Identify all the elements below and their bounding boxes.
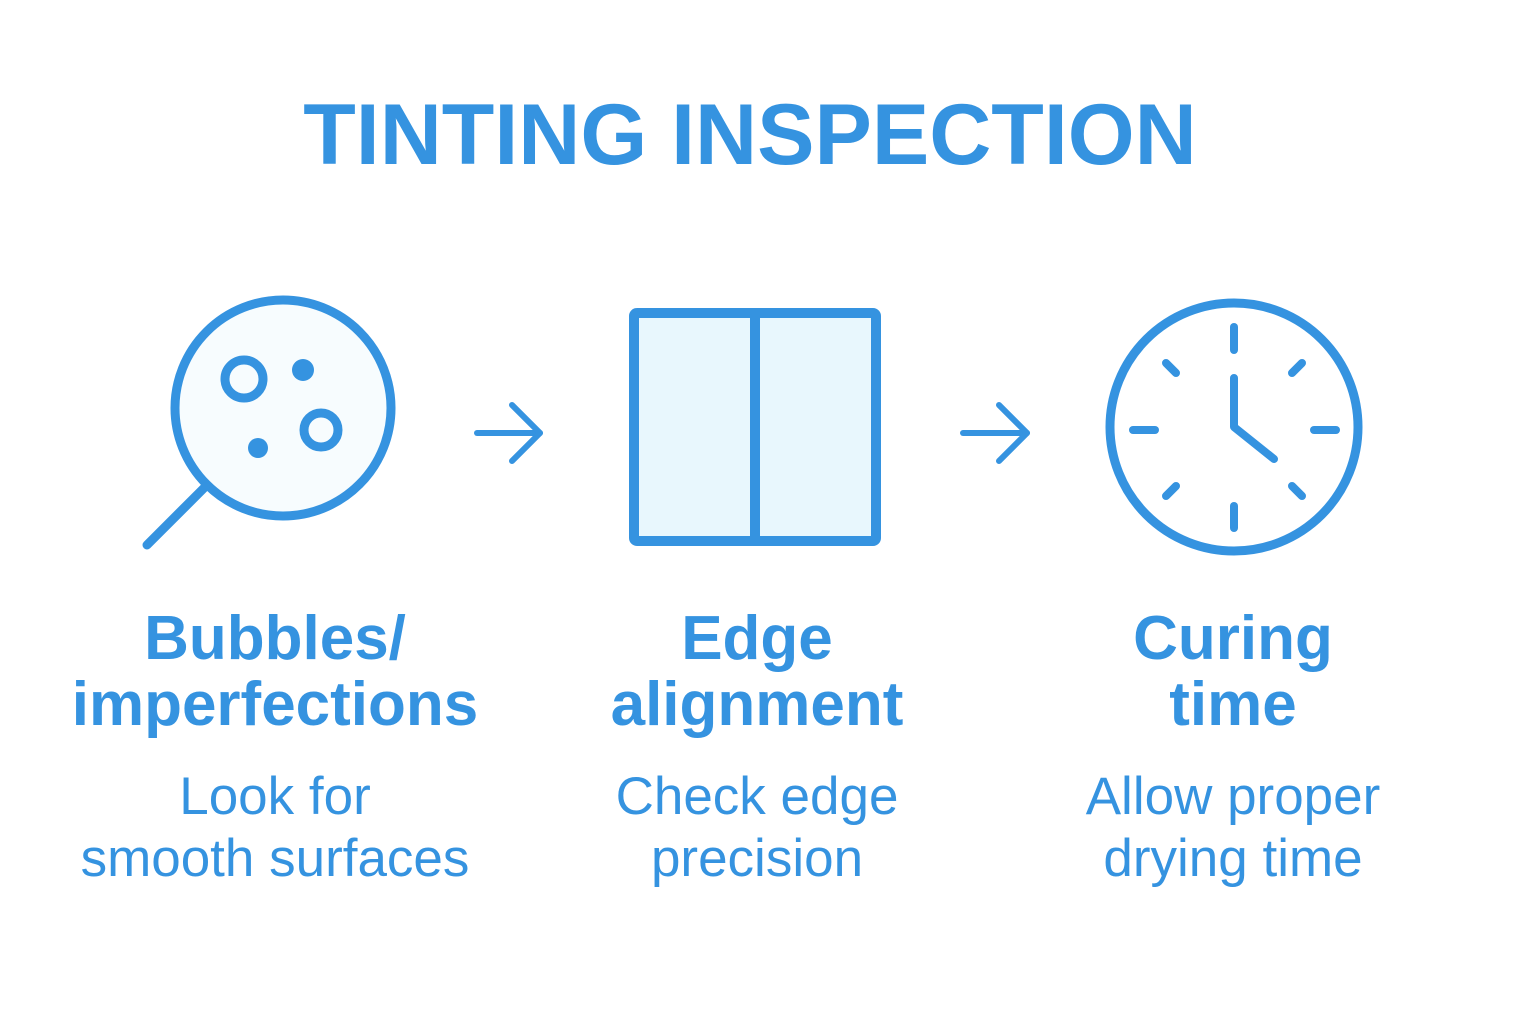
icon: clock bbox=[1110, 303, 1358, 551]
heading: edge bbox=[611, 604, 903, 739]
text: bubbles bbox=[81, 767, 469, 888]
heading: curing: time bbox=[1169, 670, 1297, 739]
heading: curing bbox=[1133, 604, 1333, 739]
text: edge: precision bbox=[651, 829, 863, 888]
text: edge bbox=[616, 767, 898, 888]
heading: edge: alignment bbox=[611, 670, 903, 739]
heading: curing: Curing bbox=[1133, 604, 1333, 673]
arrow 2 bbox=[963, 405, 1027, 461]
heading: bubbles bbox=[72, 604, 478, 739]
column: edge bbox=[611, 604, 903, 888]
text: curing bbox=[1086, 767, 1380, 888]
icon: window bbox=[634, 313, 876, 541]
text: curing: Allow proper bbox=[1086, 767, 1380, 826]
text: curing: drying time bbox=[1103, 829, 1363, 888]
column: bubbles bbox=[72, 604, 478, 888]
arrow 1 bbox=[477, 405, 540, 461]
heading: bubbles: imperfections bbox=[72, 670, 478, 739]
heading: bubbles: Bubbles/ bbox=[144, 604, 406, 673]
icon: magnifier with bubbles bbox=[147, 300, 391, 545]
heading: edge: Edge bbox=[681, 604, 833, 673]
title: TINTING INSPECTION bbox=[303, 87, 1197, 183]
text: bubbles: Look for bbox=[179, 767, 371, 826]
text: bubbles: smooth surfaces bbox=[81, 829, 469, 888]
column: curing bbox=[1086, 604, 1380, 888]
text: edge: Check edge bbox=[616, 767, 898, 826]
